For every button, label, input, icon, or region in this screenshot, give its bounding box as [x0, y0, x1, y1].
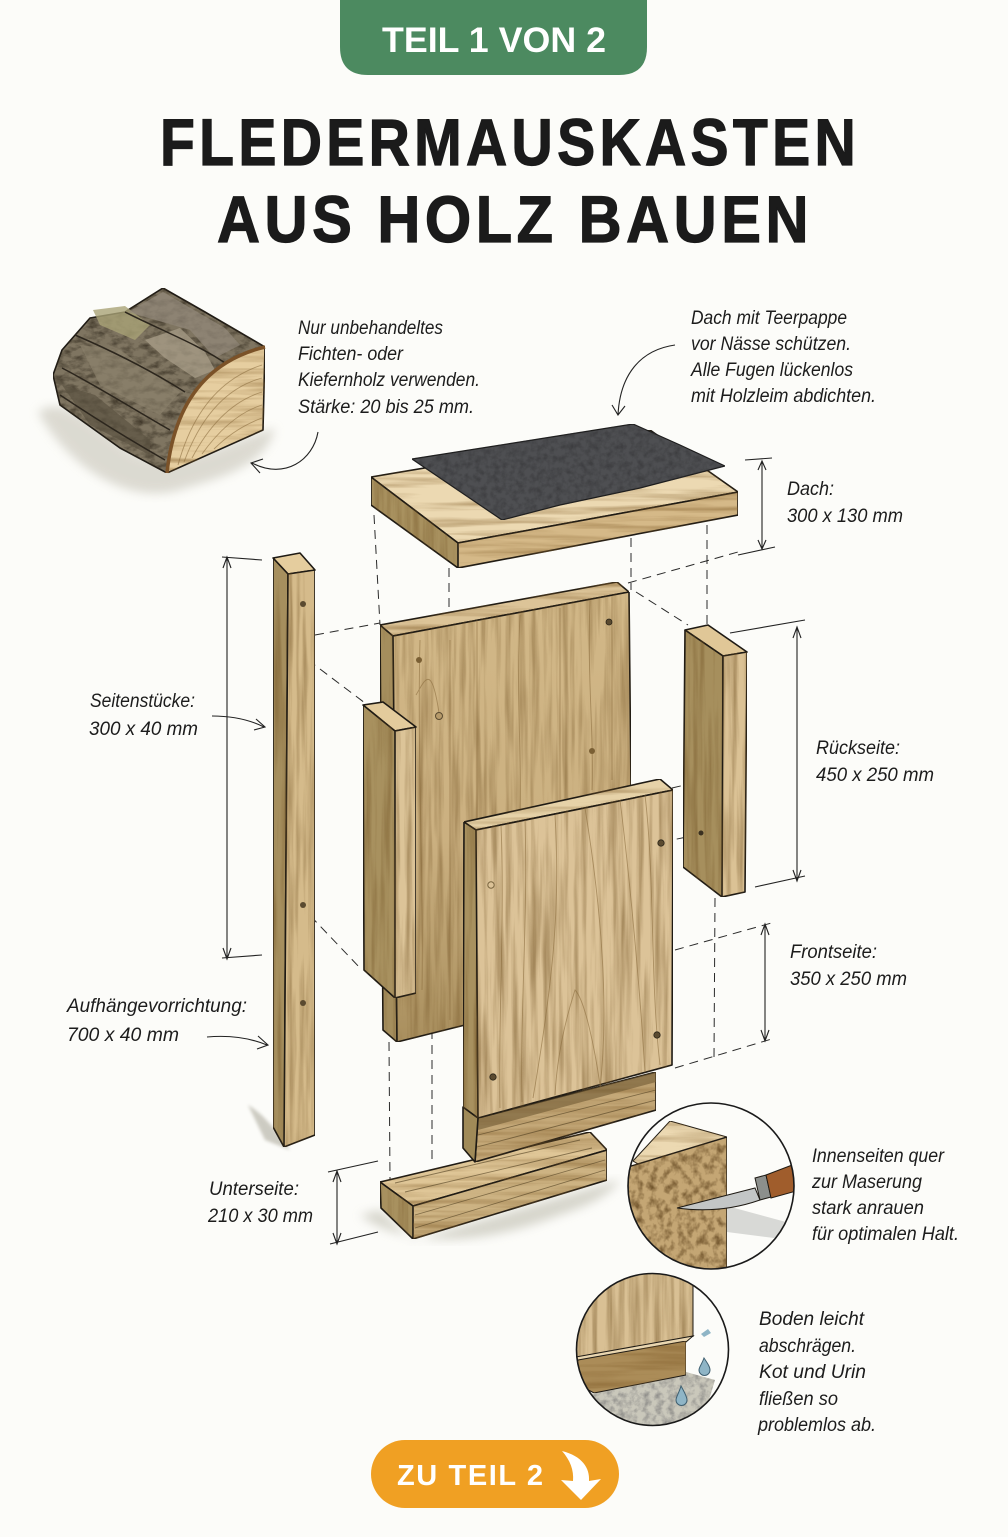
note: sloped floor	[757, 1309, 876, 1436]
note: wood type: Stärke: 20 bis 25 mm.	[298, 397, 474, 418]
note: roughen inside	[811, 1146, 959, 1245]
note: wood type: Nur unbehandeltes	[298, 318, 443, 339]
part: roof board with felt	[371, 424, 738, 568]
note: wood type: Kiefernholz verwenden.	[298, 370, 480, 391]
title	[160, 105, 860, 256]
note: wood type	[298, 318, 480, 418]
title: AUS HOLZ BAUEN	[217, 182, 813, 256]
badge: part 1 of 2	[340, 0, 647, 75]
note: sloped floor: Boden leicht	[759, 1309, 865, 1330]
dimension: Rückseite: Rückseite:	[816, 738, 900, 759]
dimension: Seitenstücke: 300 x 40 mm	[89, 719, 198, 740]
dimension: Seitenstücke	[89, 557, 265, 959]
dimension: Dach: Dach:	[787, 479, 834, 500]
icon: curved arrow	[561, 1451, 601, 1500]
part: bottom board	[360, 1132, 620, 1240]
dimension: Frontseite: Frontseite:	[790, 942, 877, 963]
note: sloped floor: abschrägen.	[759, 1336, 856, 1357]
note: sloped floor: fließen so	[759, 1389, 838, 1410]
detail circle: roughening with knife	[628, 1103, 800, 1275]
note: roughen inside: für optimalen Halt.	[812, 1224, 959, 1245]
dimension: Aufhängevorrichtung: 700 x 40 mm	[67, 1025, 179, 1046]
note: roof felt	[690, 308, 876, 407]
button: to part 2: ZU TEIL 2	[397, 1460, 543, 1492]
dimension: Dach	[738, 458, 903, 555]
dimension: Seitenstücke: Seitenstücke:	[90, 691, 195, 712]
arrow: note to roof felt	[612, 345, 675, 415]
part: back panel	[380, 582, 631, 1042]
note: roughen inside: stark anrauen	[812, 1198, 924, 1219]
dimension: Unterseite: 210 x 30 mm	[207, 1206, 313, 1227]
title: FLEDERMAUSKASTEN	[160, 105, 860, 179]
arrow: note to log	[251, 432, 318, 473]
part: left side strip	[363, 702, 416, 998]
dimension: Frontseite: 350 x 250 mm	[790, 969, 907, 990]
dimension: Rückseite: 450 x 250 mm	[816, 765, 934, 786]
dimension: Aufhängevorrichtung	[66, 996, 268, 1049]
roofing felt	[412, 424, 725, 520]
badge: part 1 of 2: TEIL 1 VON 2	[382, 21, 606, 60]
bark plates	[93, 306, 150, 340]
illustration: cut log	[38, 288, 275, 493]
part: right side strip	[683, 625, 747, 897]
dashed assembly lines	[300, 515, 738, 1180]
note: sloped floor: Kot und Urin	[759, 1362, 866, 1383]
note: roof felt: vor Nässe schützen.	[691, 334, 851, 355]
detail circle: sloped floor with drops	[570, 1265, 728, 1430]
note: roughen inside: Innenseiten quer	[812, 1146, 945, 1167]
dimension: Unterseite: Unterseite:	[209, 1179, 299, 1200]
note: roof felt: Dach mit Teerpappe	[691, 308, 847, 329]
button: to part 2	[371, 1440, 619, 1508]
note: roof felt: mit Holzleim abdichten.	[691, 386, 876, 407]
note: wood type: Fichten- oder	[298, 344, 404, 365]
dimension: Unterseite	[207, 1161, 378, 1244]
note: roof felt: Alle Fugen lückenlos	[690, 360, 853, 381]
dimension: Dach: 300 x 130 mm	[787, 506, 903, 527]
note: sloped floor: problemlos ab.	[757, 1415, 876, 1436]
part: hanging strip	[248, 553, 315, 1150]
part: front panel	[463, 779, 673, 1162]
dimension: Rückseite	[730, 620, 934, 887]
dimension: Frontseite	[675, 922, 907, 1068]
dimension: Aufhängevorrichtung: Aufhängevorrichtung:	[66, 996, 247, 1017]
note: roughen inside: zur Maserung	[811, 1172, 922, 1193]
